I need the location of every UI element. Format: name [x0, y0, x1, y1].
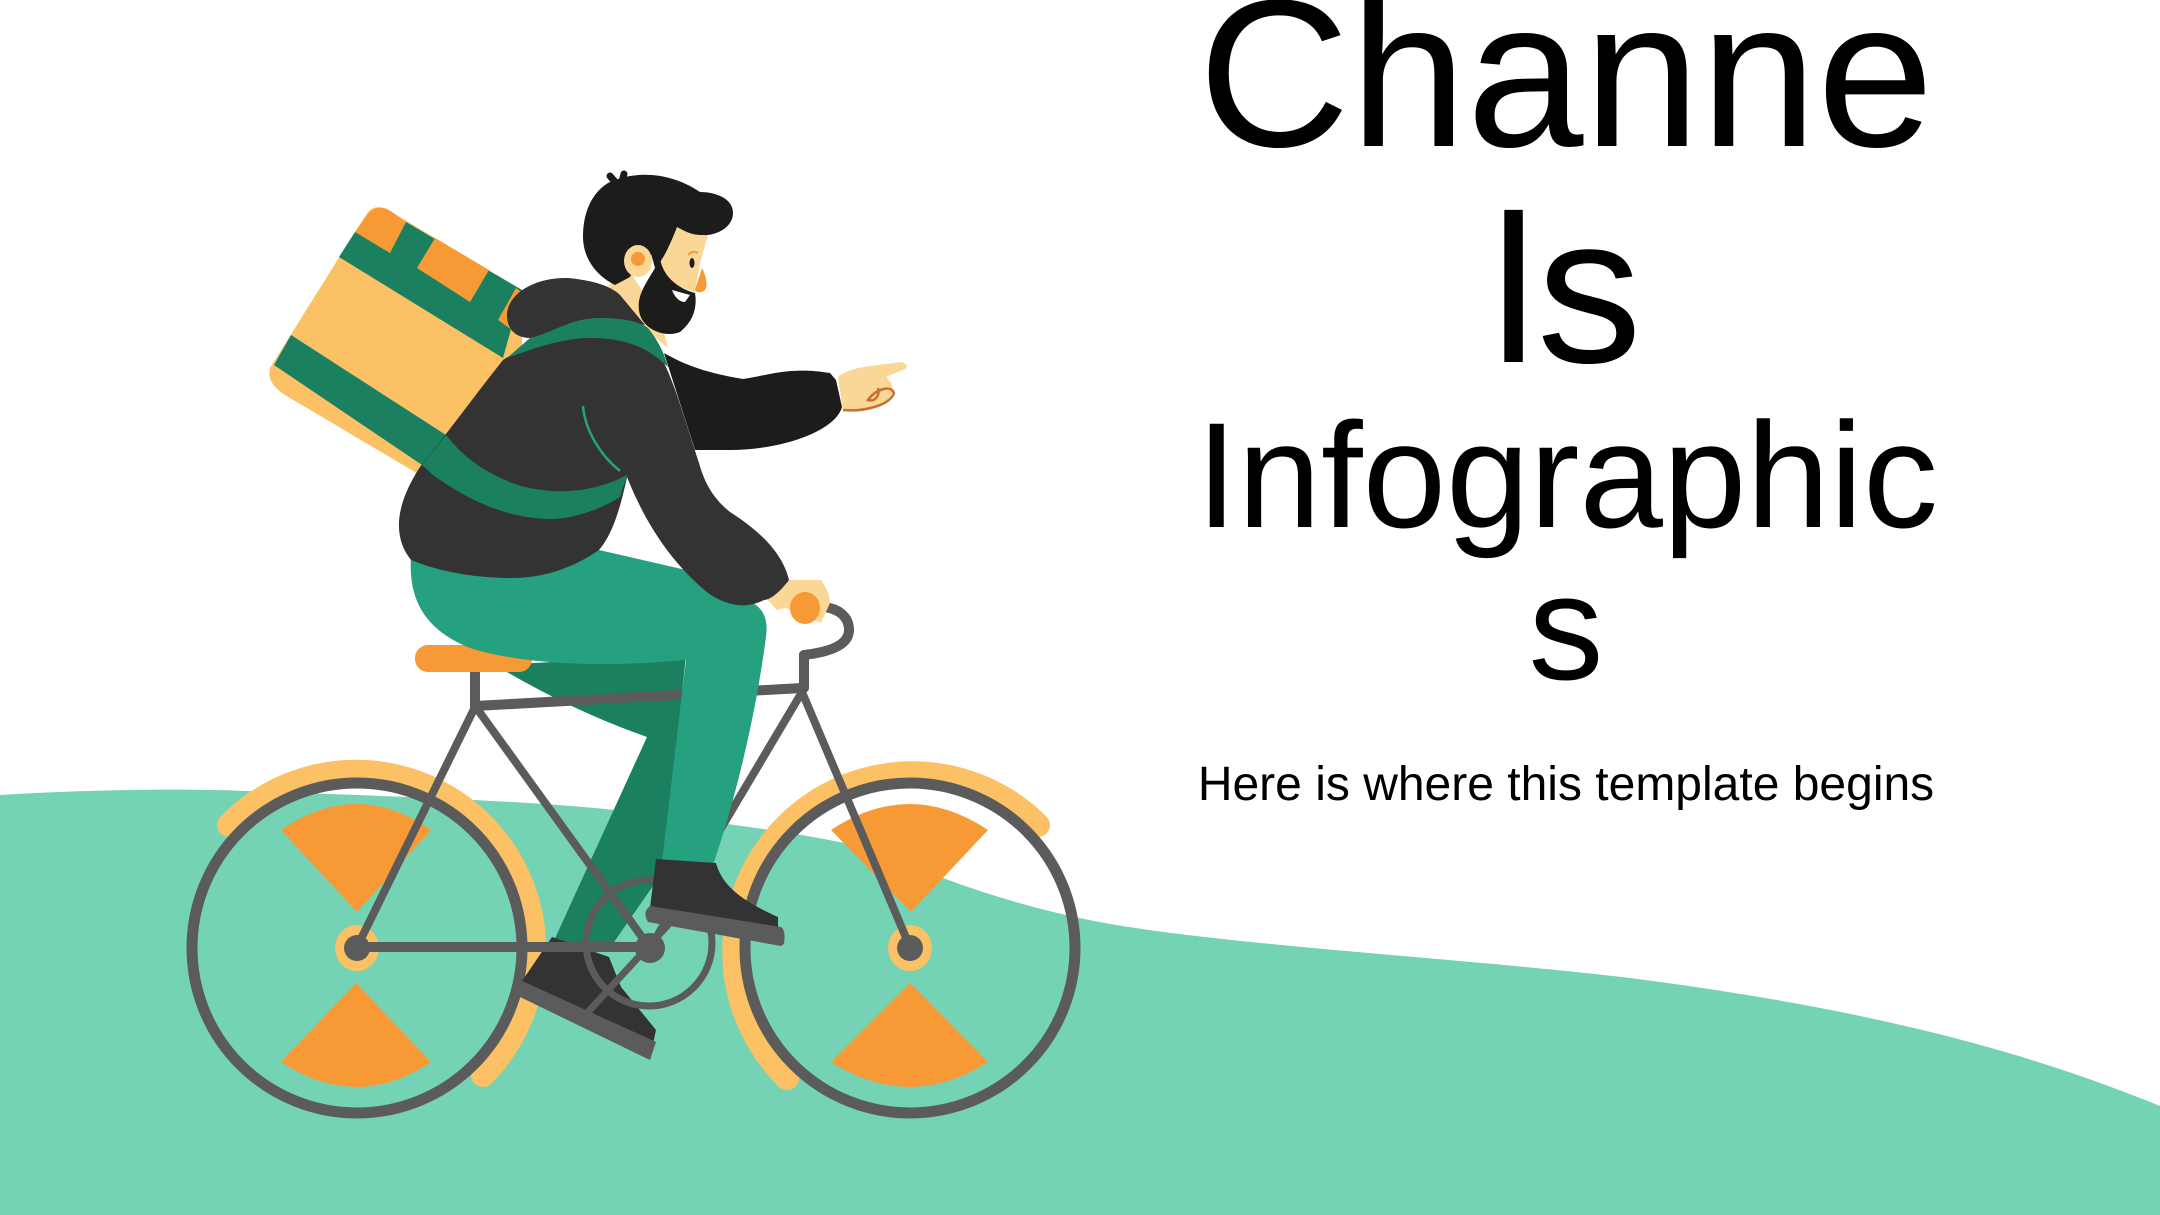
- far leg: [495, 655, 686, 945]
- beard: [639, 250, 696, 334]
- title: Infographic: [1196, 391, 1938, 559]
- title: s: [1528, 543, 1604, 711]
- far arm: [664, 353, 842, 450]
- front wheel: [745, 783, 1075, 1113]
- title: ls: [1490, 172, 1642, 407]
- chest strap: [507, 318, 668, 367]
- hair tufts: [610, 174, 624, 183]
- hood: [507, 278, 645, 338]
- head: [583, 174, 733, 334]
- title: [1196, 0, 1938, 711]
- jacket zip line: [583, 406, 620, 471]
- eye: [690, 258, 694, 268]
- illustration: cyclist with delivery backpack: [192, 174, 1075, 1113]
- neck: [608, 275, 668, 348]
- handlebar grip: [790, 592, 820, 624]
- bicycle frame: [357, 607, 910, 1012]
- backpack: [269, 207, 528, 475]
- waist strap: [422, 435, 627, 519]
- saddle: [415, 645, 532, 672]
- subtitle: Here is where this template begins: [1198, 758, 1934, 811]
- rear wheel: [192, 783, 522, 1113]
- rear mudguard: [229, 772, 534, 1075]
- green ground wave: [0, 790, 2160, 1215]
- eyebrow: [688, 252, 698, 255]
- near arm: [627, 363, 789, 605]
- torso: [399, 334, 680, 578]
- smile: [672, 290, 690, 302]
- hair: [583, 175, 733, 285]
- face: [655, 227, 708, 292]
- near leg: [411, 540, 767, 865]
- hand on handlebar: [766, 580, 830, 623]
- ear: [624, 245, 652, 277]
- pointing hand: [838, 362, 907, 410]
- far shoe: [518, 937, 656, 1060]
- nose: [695, 268, 706, 292]
- front mudguard: [734, 773, 1038, 1078]
- near shoe: [645, 859, 785, 946]
- bottom bracket and hubs: [344, 933, 923, 963]
